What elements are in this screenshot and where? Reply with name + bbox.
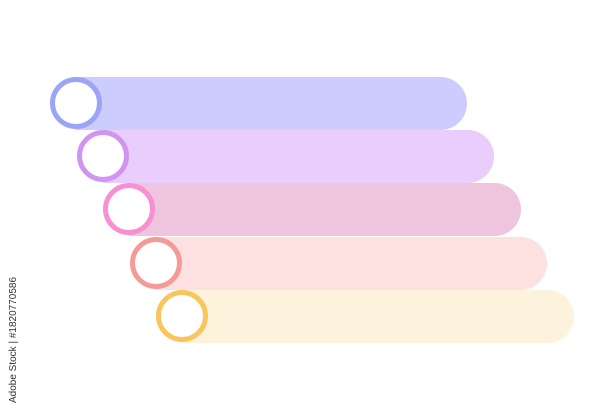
bar 5 [182, 290, 574, 343]
icon: circle 2 [77, 130, 129, 182]
icon: circle 4 [130, 237, 182, 289]
bar 4 [156, 237, 547, 290]
bar 2 [103, 130, 494, 183]
icon: circle 3 [103, 183, 155, 235]
icon: circle 1 [50, 77, 102, 129]
bar 1 [76, 77, 467, 130]
credit text: Adobe Stock | #1820770586 [8, 277, 19, 403]
icon: circle 5 [156, 290, 208, 342]
bar 3 [129, 183, 521, 236]
